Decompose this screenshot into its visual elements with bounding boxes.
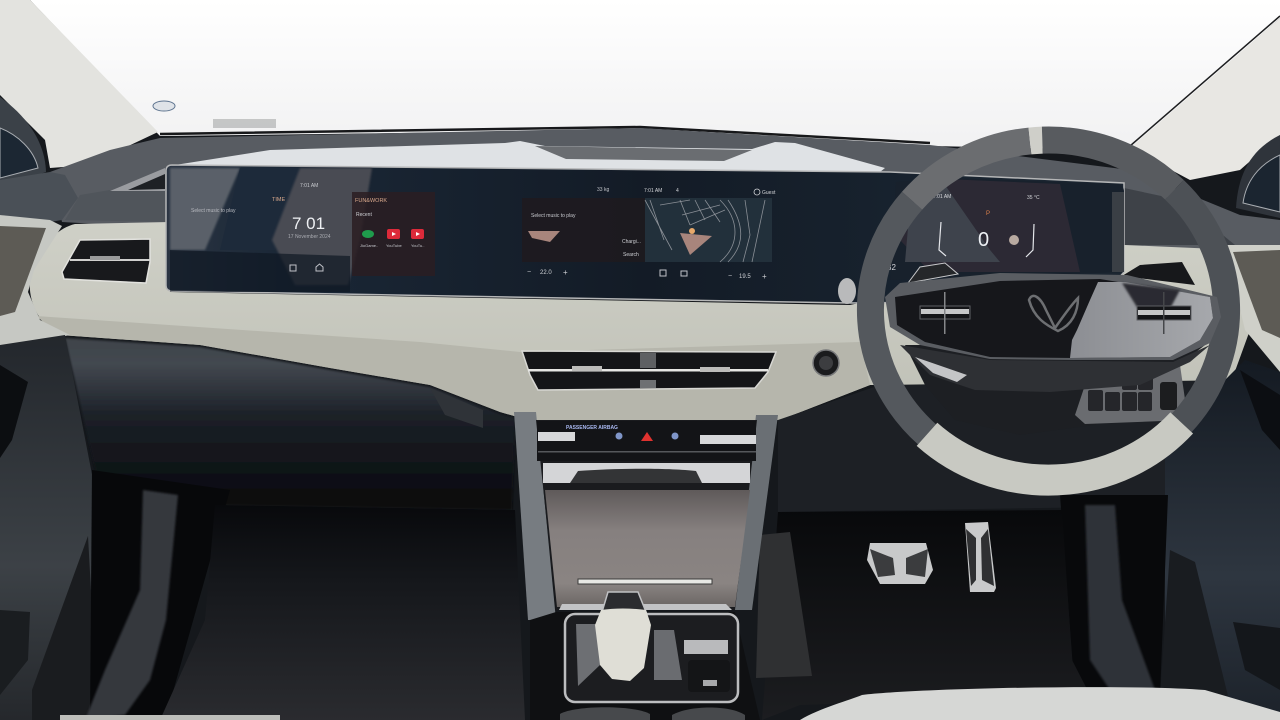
lower console glossy panel [543,463,750,483]
left screen content: Select music to play [191,208,236,214]
door speakers [0,226,1280,338]
console icon right [672,432,678,440]
left door trim [0,215,70,350]
main display [166,165,1124,303]
door handle recess [0,365,28,458]
airbag label: PASSENGER AIRBAG [566,425,618,431]
left screen content [191,183,424,271]
instrument cluster: 0 [978,229,989,251]
left screen content: YouTube [386,243,402,248]
center screen content: − [527,269,531,276]
right thumb control [1137,292,1191,334]
glovebox notch [430,388,483,428]
windshield sticker [153,101,175,111]
windshield small print [213,119,276,128]
shift knob [595,608,651,681]
sill strip [85,490,178,720]
left screen content: 7 01 [292,214,325,233]
lower left dash lip [65,190,166,222]
door handle recess right [1240,370,1280,450]
instrument cluster: 35 °C [1027,195,1040,201]
steering paddles [908,262,1195,285]
brand logo [1029,296,1078,331]
brake pedal [867,543,933,584]
lower dash / glovebox [65,338,515,510]
rim bottom [927,423,1182,480]
center screen content: Chargi... [622,239,641,245]
carpet right [762,510,1090,720]
black sill shade [90,470,230,720]
door mesh right [1160,550,1228,696]
black sill shade right [1060,495,1168,695]
left lower pod panel [0,172,78,222]
left thumb control [920,292,970,334]
carpet left [160,505,525,720]
accelerator pedal [965,522,996,592]
stalk [838,278,856,304]
dash lower trim band [36,316,870,420]
chrome bar [578,579,712,584]
right dash dark section [1124,188,1235,245]
center screen content: Search [623,252,639,258]
steering wheel rim [870,140,1227,480]
center screen content [527,187,776,281]
left air vent [62,239,150,283]
hub chin [900,345,1210,392]
left screen content: 17 November 2024 [288,234,331,240]
center console sides [514,412,778,620]
rim top right [1042,140,1174,190]
right lower dash [778,380,1240,512]
gloss reflection [570,469,702,483]
windshield [30,0,1280,150]
left door [0,335,230,720]
steering column shroud [905,345,1205,435]
rim left [870,201,927,434]
right mirror pod [1236,135,1280,218]
left chrome panel [538,432,575,441]
left mirror pod [0,97,46,188]
map lines [645,200,765,262]
left screen content: Recent [356,212,372,218]
center screen content: Guest [762,190,776,196]
center screen content: 4 [676,188,679,194]
instrument cluster [887,178,1124,280]
right door trim [1225,245,1280,372]
screen reflections [170,168,772,292]
steering wheel hub [885,273,1221,392]
console icon left [616,432,622,440]
hub gloss [895,279,1213,358]
center screen content: 22.0 [540,270,552,276]
top dash band [50,128,1280,260]
left screen content: JioGame.. [360,243,378,248]
center screen content: + [762,272,767,281]
console reflections [576,624,600,686]
rim right [1174,190,1227,423]
instrument cluster: P [986,211,990,217]
left screen content: TIME [272,197,285,203]
right sill strip [1085,505,1155,690]
center screen content: 33 kg [597,187,609,193]
center air vent [522,351,776,390]
chin glare [915,357,967,382]
start button [813,350,839,376]
center screen content: + [563,268,568,277]
left dash vent strip [110,168,165,191]
gear selector [530,592,760,720]
instrument cluster: 32 [887,263,896,272]
center console [536,420,757,610]
windshield bottom edge [160,127,930,143]
left seat [60,715,280,720]
right seat [800,687,1280,720]
dash speaker grille [535,146,752,161]
left screen content: YouTu.. [411,243,424,248]
door bin right [1233,622,1280,690]
center screen content: 7:01 AM [644,188,662,194]
center screen content: − [728,273,732,280]
beige dash trim [30,222,1250,420]
hub frame [885,273,1221,360]
floor mat [756,532,812,678]
panel: hazard row [537,421,756,461]
hub glare [1070,282,1213,358]
left screen content: FUN&WORK [355,198,387,204]
shift knob frame [602,592,646,612]
metal panel [545,490,750,607]
center screen content: Select music to play [531,213,576,219]
door bin [0,610,30,695]
gauge brackets [939,222,1034,257]
cup button panel [688,660,730,692]
right door [1060,360,1280,720]
cup holders [560,707,650,720]
rim top left [912,141,1030,201]
right chrome panel [700,435,756,444]
door bottom mesh [32,536,98,720]
control switch panel [1075,365,1188,424]
shifter surround [565,614,738,702]
instrument cluster: 7:01 AM [933,194,951,200]
right A pillar [1130,16,1280,180]
hub reflection [1122,283,1180,318]
rim stripe [1030,127,1042,154]
center screen content: 19.5 [739,274,751,280]
left screen content: 7:01 AM [300,183,318,189]
chrome top bar [559,604,732,610]
left A pillar [0,0,158,168]
light dash pad [175,141,885,172]
hazard button [641,432,653,441]
